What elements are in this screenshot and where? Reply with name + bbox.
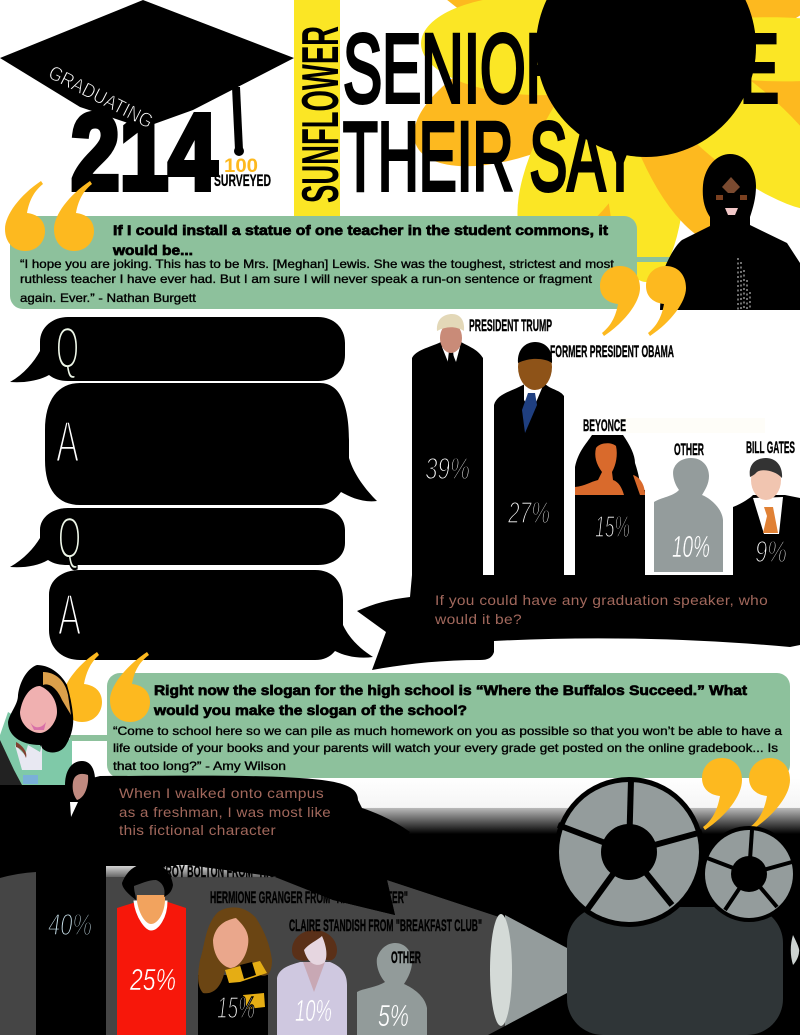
ribbon: speaker question: If you could have any graduation speaker, who bbox=[435, 592, 768, 608]
panel: teacher statue quote: If I could install a statue of one teacher in the student commons, it bbox=[113, 222, 608, 238]
label: Hermione Granger: HERMIONE GRANGER FROM "HARRY POTTER" bbox=[210, 888, 408, 907]
panel: teacher statue quote: would be... bbox=[112, 242, 193, 258]
panel: school slogan quote bbox=[70, 673, 790, 778]
panel: school slogan quote: life outside of your books and your parents will watch your every grade get posted on the online gradebook... Is bbox=[113, 741, 778, 755]
icon: slogan closing quotes bbox=[702, 758, 790, 830]
speech bubble: question 1: Q bbox=[56, 316, 79, 381]
gray stage behind fictional characters chart bbox=[0, 872, 505, 1035]
camera small side lens bbox=[791, 935, 799, 965]
portrait: small person top of bar bbox=[65, 761, 95, 820]
portrait: teacher quote student bbox=[637, 154, 800, 310]
speech bubble: question 2: Q bbox=[58, 506, 81, 571]
speech bubble: question 2 bbox=[10, 506, 345, 571]
camera body bbox=[567, 907, 783, 1035]
bar: Troy Bolton 25%: 25% bbox=[129, 962, 176, 997]
panel: teacher statue quote bbox=[5, 181, 637, 309]
speech bubble: answer 1: A bbox=[56, 410, 79, 475]
bar: Obama 27% bbox=[494, 342, 564, 600]
bar: Claire 10%: 10% bbox=[295, 993, 332, 1028]
panel: school slogan quote: “Come to school here so we can pile as much homework on you as possible so that you won’t be able to have a bbox=[113, 724, 782, 738]
ribbon over chart bbox=[170, 850, 500, 917]
speech bubble: question 1 bbox=[10, 316, 345, 382]
bottom backdrop gradient bbox=[0, 778, 800, 1035]
chart: fictional characters bbox=[36, 860, 482, 1035]
bar: 40% bbox=[36, 860, 106, 1035]
title bbox=[343, 14, 779, 211]
bar: Trump 39%: 39% bbox=[425, 451, 470, 486]
bar: Obama 27%: 27% bbox=[507, 495, 550, 530]
bar: Beyonce 15% bbox=[575, 435, 645, 600]
icon: opening quotes bbox=[5, 181, 94, 251]
bar: Bill Gates 9%: 9% bbox=[755, 534, 787, 569]
label: Claire Standish: CLAIRE STANDISH FROM "BREAKFAST CLUB" bbox=[289, 916, 482, 935]
light strip behind first label bbox=[106, 865, 281, 877]
chart: graduation speaker bbox=[412, 314, 800, 600]
panel: school slogan quote: would you make the slogan of the school? bbox=[153, 702, 467, 718]
speech bubble: answer 2: A bbox=[58, 583, 81, 648]
label: Beyonce: BEYONCE bbox=[583, 416, 626, 435]
panel: school slogan quote: that too long?” - Amy Wilson bbox=[113, 759, 286, 773]
label: President Trump: PRESIDENT TRUMP bbox=[469, 316, 552, 335]
stat: 100 surveyed: SURVEYED bbox=[214, 171, 271, 190]
icon: slogan opening quotes bbox=[62, 652, 150, 722]
white page break below header bbox=[0, 310, 800, 780]
bar: Bill Gates 9% bbox=[733, 458, 800, 600]
camera lens bbox=[490, 914, 567, 1026]
ribbon: speaker question: would it be? bbox=[434, 611, 522, 627]
bar: Other 10% bbox=[654, 458, 723, 572]
bar: Other 5%: 5% bbox=[378, 998, 409, 1033]
speech bubble: answer 2 bbox=[49, 570, 373, 660]
stat: 100 surveyed bbox=[214, 156, 271, 190]
bar: Claire 10% bbox=[277, 930, 347, 1035]
large reel bbox=[554, 777, 704, 927]
bar: Other 10%: 10% bbox=[672, 529, 710, 564]
black speech blob with question: as a freshman, I was most like bbox=[119, 804, 331, 820]
speech bubble: answer 1 bbox=[45, 383, 377, 505]
sunflower petals bbox=[394, 0, 800, 282]
ribbon: speaker question bbox=[357, 575, 800, 670]
bar: 40%: 40% bbox=[48, 907, 92, 942]
icon: film camera bbox=[490, 777, 799, 1035]
panel: school slogan quote: Right now the slogan for the high school is “Where the Buffalos Succeed.” What bbox=[154, 682, 747, 698]
stat: 214 graduating: GRADUATING bbox=[45, 62, 156, 133]
stat: 100 surveyed: 100 bbox=[224, 156, 258, 177]
portrait: Amy Wilson bbox=[0, 665, 73, 785]
bar: Hermione 15%: 15% bbox=[217, 990, 255, 1025]
panel: teacher statue quote: again. Ever.” - Nathan Burgett bbox=[20, 291, 197, 305]
graduation cap bbox=[0, 0, 294, 156]
black speech blob with question: When I walked onto campus bbox=[119, 785, 324, 801]
panel: teacher statue quote: “I hope you are joking. This has to be Mrs. [Meghan] Lewis. She was the toughest, strictest and most bbox=[20, 257, 615, 271]
bar: Beyonce 15%: 15% bbox=[595, 509, 630, 544]
sunflower center bbox=[536, 0, 756, 157]
label: Troy Bolton: TROY BOLTON FROM "HIGH SCHOOL MUSICAL" bbox=[160, 862, 370, 881]
black speech blob with question: this fictional character bbox=[119, 822, 276, 838]
label: Other: OTHER bbox=[674, 440, 704, 459]
label: Other: OTHER bbox=[391, 948, 421, 967]
bar: Trump 39% bbox=[412, 314, 483, 600]
label: Former President Obama: FORMER PRESIDENT OBAMA bbox=[550, 342, 674, 361]
small reel bbox=[701, 826, 797, 922]
bar: Troy Bolton 25% bbox=[117, 863, 186, 1035]
black speech blob with question bbox=[0, 776, 410, 871]
icon: closing quotes bbox=[600, 266, 686, 336]
stat: 214 graduating bbox=[45, 62, 217, 212]
panel: teacher statue quote: ruthless teacher I have ever had. But I am sure I will never speak a run-on sentence or fragment bbox=[20, 272, 593, 286]
stat: 214 graduating: 214 bbox=[71, 91, 217, 212]
bar: Other 5% bbox=[357, 943, 427, 1035]
bar: Hermione 15% bbox=[198, 907, 272, 1035]
